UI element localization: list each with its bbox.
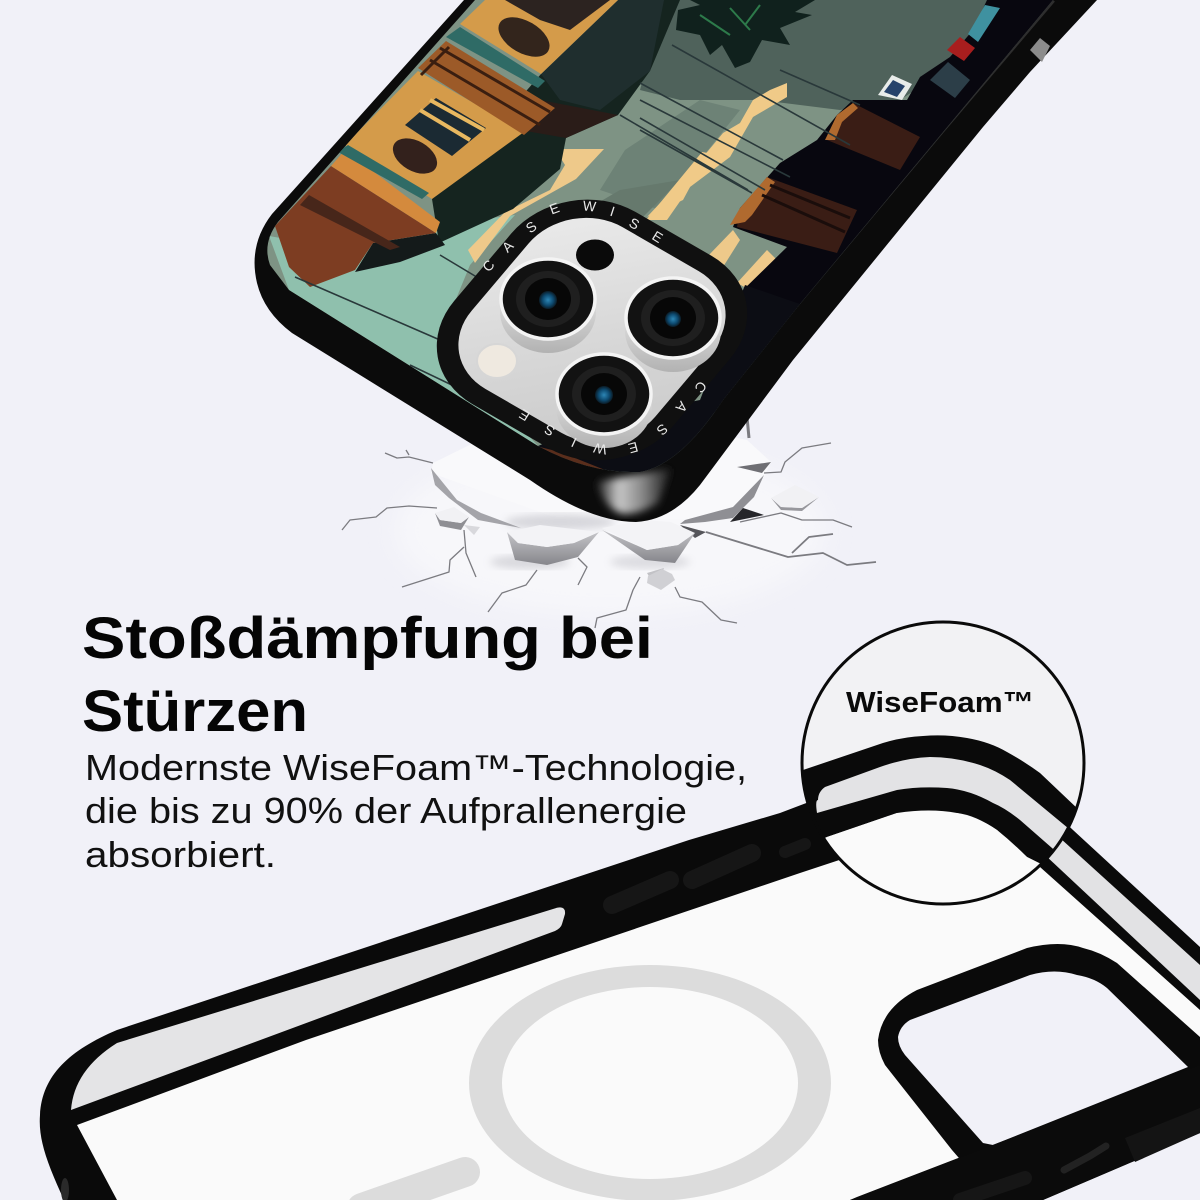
case frame bbox=[40, 760, 1200, 1200]
camera bumper ring bbox=[401, 171, 783, 489]
power lines bbox=[295, 45, 860, 420]
brown lower storey bbox=[275, 166, 436, 287]
crack lines bbox=[342, 417, 876, 628]
case shell bbox=[255, 0, 1097, 522]
cream light shafts bbox=[468, 149, 604, 263]
callout: WiseFoam magnifier bbox=[800, 620, 1086, 906]
right slab edge bbox=[680, 475, 764, 524]
heading: Stürzen bbox=[82, 679, 308, 744]
body text bbox=[85, 747, 747, 875]
brand text on bumper: C bbox=[479, 257, 498, 275]
lower left opening bbox=[61, 1178, 69, 1200]
plant bbox=[676, 0, 815, 68]
dark print area under camera bbox=[538, 285, 800, 480]
brand text on bumper: S bbox=[626, 214, 642, 233]
camera cutout frame bbox=[878, 944, 1200, 1165]
upper gold facade bbox=[460, 0, 618, 74]
orange entablature bbox=[418, 41, 555, 135]
gloss highlight bbox=[596, 468, 672, 514]
brand text on bumper: E bbox=[516, 406, 533, 425]
magsafe ring bbox=[469, 965, 831, 1200]
teal band upper bbox=[446, 27, 545, 88]
rock piece B bbox=[602, 530, 695, 563]
foam channel right bbox=[1045, 838, 1200, 1000]
right dark buildings bbox=[714, 0, 1053, 412]
bottom rim bbox=[850, 1065, 1200, 1200]
charging port and speaker bbox=[1064, 1146, 1106, 1170]
body text: absorbiert. bbox=[85, 834, 276, 875]
callout label: WiseFoam™ bbox=[846, 687, 1034, 719]
pixel art print bbox=[260, 0, 1100, 480]
phone with printed case bbox=[255, 0, 1100, 522]
body text: die bis zu 90% der Aufprallenergie bbox=[85, 790, 687, 831]
clear back panel bbox=[77, 840, 1200, 1200]
camera cutout opening bbox=[898, 972, 1188, 1145]
dark wedge bbox=[737, 462, 771, 473]
magnified content bbox=[804, 735, 1076, 866]
brand text on bumper: W bbox=[591, 440, 608, 458]
lens 3 bbox=[556, 354, 652, 448]
camera island bbox=[401, 171, 783, 489]
brand text on bumper: S bbox=[523, 218, 540, 236]
small rock C bbox=[435, 513, 469, 530]
brand text on bumper: A bbox=[672, 398, 691, 416]
silver camera plate bbox=[432, 196, 752, 464]
small rock D bbox=[464, 525, 480, 535]
shop signs bbox=[878, 75, 912, 100]
button cutouts bbox=[612, 844, 805, 905]
body text: Modernste WiseFoam™-Technologie, bbox=[85, 747, 747, 788]
left building dark side bbox=[432, 0, 680, 243]
small rock E bbox=[771, 497, 819, 511]
right brown cornices bbox=[827, 103, 920, 170]
foam channel left bbox=[71, 907, 565, 1110]
brand text on bumper: W bbox=[582, 197, 598, 215]
left slab edge bbox=[431, 468, 521, 528]
brand text on bumper: E bbox=[547, 199, 561, 217]
brand text on bumper: E bbox=[627, 439, 640, 457]
callout ring bbox=[802, 622, 1084, 904]
rock piece A bbox=[507, 532, 599, 565]
side button highlights bbox=[1030, 38, 1050, 62]
cracked ground impact bbox=[342, 417, 876, 628]
heading: Stoßdämpfung bei bbox=[82, 606, 653, 671]
brand text on bumper: S bbox=[541, 421, 558, 440]
brand text on bumper: S bbox=[654, 421, 671, 439]
brand text on bumper: A bbox=[499, 237, 517, 255]
brand text on bumper: I bbox=[569, 434, 579, 451]
lens 2 bbox=[625, 278, 721, 372]
heading bbox=[82, 606, 653, 744]
brand text on bumper: C bbox=[691, 378, 710, 396]
mint sky bbox=[269, 215, 538, 446]
teal band lower bbox=[338, 145, 429, 199]
silhouette under brown storey bbox=[355, 233, 445, 272]
brand text on bumper: E bbox=[649, 227, 666, 246]
flash bbox=[477, 344, 517, 378]
brand text on bumper: I bbox=[608, 203, 617, 219]
magsafe orientation pill bbox=[362, 1172, 465, 1200]
microphone hole bbox=[576, 240, 614, 270]
lens 1 bbox=[500, 259, 596, 353]
clear case with foam channel bbox=[40, 760, 1200, 1200]
upper city haze bbox=[640, 0, 1000, 110]
brand text on bumper bbox=[479, 197, 710, 458]
small rock F bbox=[647, 568, 664, 578]
lower gold facade bbox=[345, 71, 524, 199]
dark crevice bbox=[730, 508, 764, 522]
